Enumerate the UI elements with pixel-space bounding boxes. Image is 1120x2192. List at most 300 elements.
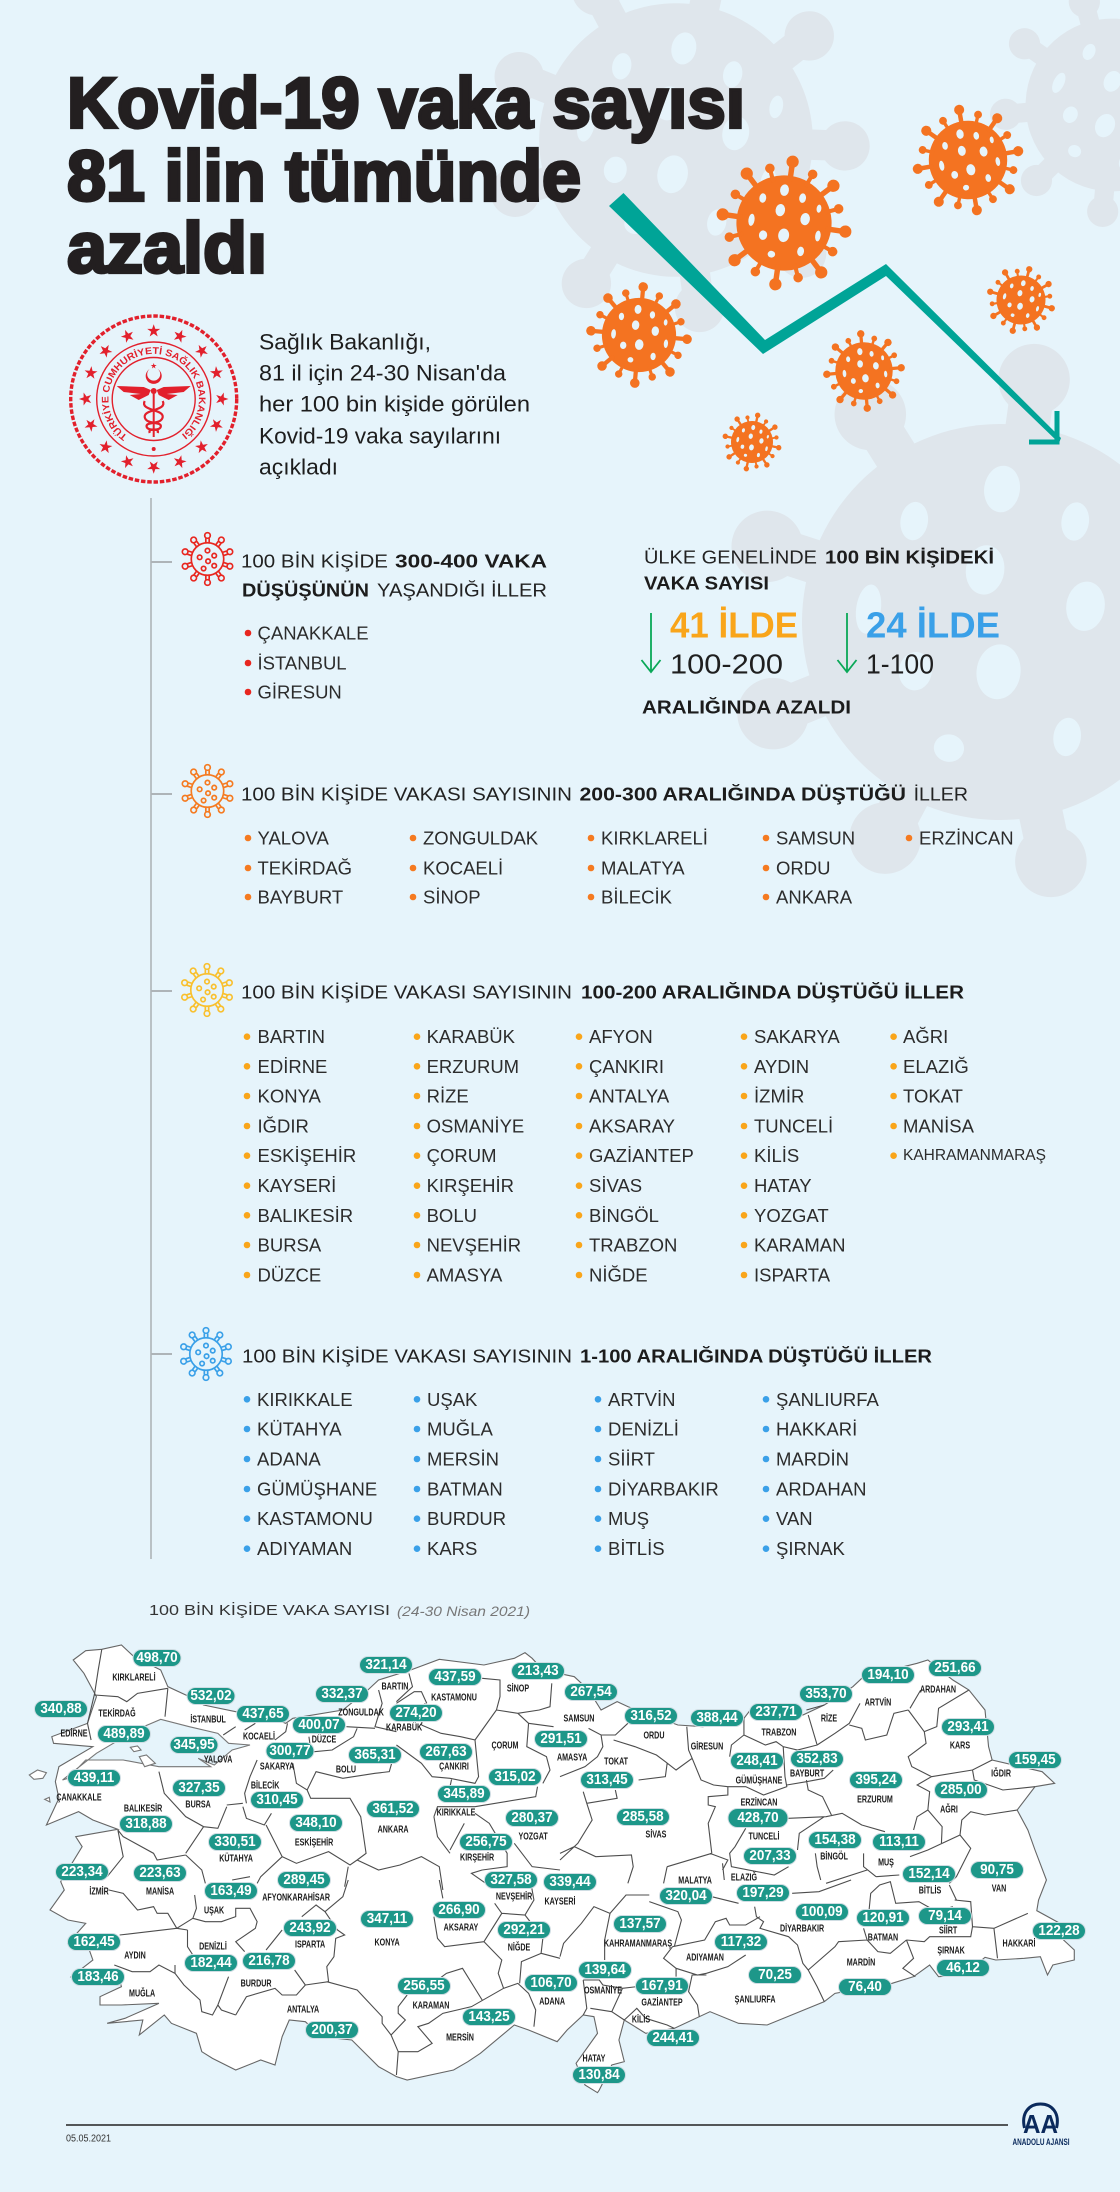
map: case value pills: 365,31 [354, 1747, 396, 1763]
intro text: açıkladı [259, 454, 338, 480]
map: case value pills: 280,37 [511, 1810, 553, 1826]
section 1 list [245, 622, 369, 702]
map: province names: SİİRT [939, 1924, 958, 1936]
map: case value pills: 70,25 [758, 1967, 792, 1983]
map: province names: KONYA [375, 1936, 400, 1948]
map: case value pills: 313,45 [586, 1772, 628, 1788]
map: province names: TRABZON [762, 1726, 796, 1738]
map: province names: ESKİŞEHİR [295, 1836, 334, 1848]
section 3 list: NİĞDE [589, 1264, 648, 1286]
map: case value pills: 266,90 [438, 1902, 480, 1918]
map: case value pills: 437,59 [434, 1669, 476, 1685]
section 2 list: ORDU [776, 858, 830, 878]
map: case value pills: 274,20 [395, 1705, 437, 1721]
section 1 heading [241, 550, 547, 600]
Anadolu Ajansı logo [1012, 2104, 1070, 2147]
section 3 list: KARAMAN [754, 1234, 846, 1256]
map: case value pills: 289,45 [283, 1872, 325, 1888]
date: 05.05.2021 [66, 2134, 111, 2144]
stat: 24 ilde: 1-100 [866, 648, 934, 680]
intro text: 81 il için 24-30 Nisan'da [259, 360, 507, 386]
map: province names: MUŞ [878, 1856, 894, 1868]
map: province names: BİLECİK [251, 1779, 280, 1791]
map: province names: YALOVA [204, 1753, 233, 1765]
section 2 list: MALATYA [601, 858, 685, 878]
map: province names: NİĞDE [508, 1940, 530, 1953]
map: province names: KİLİS [632, 2013, 650, 2025]
map: province names: MARDİN [847, 1956, 875, 1968]
title [67, 64, 745, 288]
map: province names: GAZİANTEP [641, 1996, 683, 2008]
icon: yellow virus outline [181, 964, 233, 1016]
map: case value pills: 320,04 [665, 1888, 707, 1904]
map: province names: AMASYA [557, 1751, 588, 1763]
map: case value pills: 137,57 [619, 1916, 661, 1932]
map: province names: KARABÜK [386, 1721, 423, 1733]
map: case value pills: 318,88 [125, 1816, 167, 1832]
map: case value pills: 532,02 [190, 1688, 232, 1704]
section 3 list: TOKAT [903, 1086, 963, 1106]
section 4 list: ARTVİN [608, 1389, 676, 1410]
map: case value pills: 113,11 [879, 1834, 919, 1850]
map: case value pills: 106,70 [530, 1975, 572, 1991]
section 1 list: GİRESUN [258, 682, 342, 702]
map: province names: MANİSA [146, 1885, 175, 1897]
map: case value pills: 267,54 [570, 1684, 612, 1700]
section 3 list: ESKİŞEHİR [258, 1145, 356, 1166]
map: case value pills: 332,37 [321, 1686, 363, 1702]
map: case value pills: 251,66 [934, 1660, 976, 1676]
section 3 list: TUNCELİ [754, 1116, 833, 1136]
section 3 list: ELAZIĞ [903, 1056, 969, 1077]
intro text: her 100 bin kişide görülen [259, 392, 530, 416]
section 3 list: KAHRAMANMARAŞ [903, 1147, 1046, 1164]
section 1 heading: 100 BİN KİŞİDE [241, 550, 388, 572]
map: province names: SİNOP [507, 1682, 529, 1694]
map: case value pills: 223,63 [139, 1865, 181, 1881]
map: province names: OSMANİYE [584, 1984, 622, 1996]
map: case value pills: 316,52 [630, 1708, 672, 1724]
section 2 list: ZONGULDAK [423, 828, 539, 848]
Anadolu Ajansı logo: AA [1023, 2109, 1058, 2139]
map: province names: KARS [950, 1739, 970, 1751]
map: case value pills: 352,83 [796, 1751, 838, 1767]
map: province names: TEKİRDAĞ [98, 1706, 136, 1719]
map: province names: BALIKESİR [124, 1802, 163, 1814]
map: province names: NEVŞEHİR [496, 1890, 533, 1902]
section 4 list: BATMAN [427, 1478, 503, 1500]
map: province names: ARTVİN [865, 1696, 891, 1708]
map: case value pills: 79,14 [928, 1908, 962, 1924]
summary footer: ARALIĞINDA AZALDI [642, 696, 851, 718]
map heading: 100 BİN KİŞİDE VAKA SAYISI [149, 1601, 390, 1619]
section 3 list: AĞRI [903, 1026, 948, 1047]
section 3 list: BOLU [427, 1205, 477, 1226]
section 4 heading: 100 BİN KİŞİDE VAKASI SAYISININ [242, 1346, 572, 1366]
map: province names: ANKARA [378, 1823, 409, 1835]
section 4 list: MUŞ [608, 1508, 649, 1529]
map: province names: MALATYA [678, 1874, 712, 1886]
map: province names: SİVAS [646, 1828, 666, 1840]
map: case value pills: 162,45 [73, 1934, 115, 1950]
section 1 heading: 300-400 VAKA [395, 550, 547, 572]
map: province names: BURSA [185, 1798, 211, 1810]
section 3: 100-200 [181, 964, 1046, 1286]
section 4 list: ŞANLIURFA [776, 1389, 879, 1410]
map: province names: IĞDIR [991, 1766, 1011, 1779]
section 2 list: BİLECİK [601, 886, 673, 908]
section 3 list: ISPARTA [754, 1264, 831, 1286]
map: province names: ŞIRNAK [937, 1944, 965, 1956]
map heading [149, 1601, 530, 1619]
trend arrow [609, 193, 1061, 443]
map: province names: BURDUR [241, 1977, 272, 1989]
section 1 list: İSTANBUL [258, 652, 347, 674]
map: case value pills: 207,33 [749, 1848, 791, 1864]
map: province names: MERSİN [446, 2031, 474, 2043]
map: case value pills: 439,11 [74, 1770, 114, 1786]
orange virus: large [707, 146, 861, 300]
map: case value pills: 159,45 [1014, 1752, 1056, 1768]
map: case value pills: 321,14 [365, 1657, 407, 1673]
map: case value pills: 256,55 [403, 1978, 445, 1994]
map: province names: ÇANAKKALE [56, 1791, 102, 1803]
map: case value pills: 498,70 [136, 1650, 178, 1666]
national summary panel [642, 546, 1000, 718]
map: province names: GİRESUN [691, 1740, 723, 1752]
map: province names: AKSARAY [444, 1921, 478, 1933]
map: province names: KIRIKKALE [437, 1806, 475, 1818]
map: province names: DİYARBAKIR [780, 1922, 825, 1934]
map heading: (24-30 Nisan 2021) [397, 1603, 530, 1619]
map: province names: AYDIN [124, 1949, 146, 1961]
section 3 heading: 100 BİN KİŞİDE VAKASI SAYISININ [241, 982, 572, 1002]
section 4 list: SİİRT [608, 1448, 655, 1470]
section 4 list: UŞAK [427, 1389, 478, 1410]
map: case value pills: 154,38 [814, 1832, 856, 1848]
arrow: down green 2 [838, 613, 856, 672]
section 4 list: MUĞLA [427, 1418, 493, 1440]
section 3 list: AMASYA [427, 1264, 503, 1286]
section 4 list: HAKKARİ [776, 1418, 857, 1440]
map: case value pills: 152,14 [908, 1866, 950, 1882]
section 4 list: ARDAHAN [776, 1478, 866, 1500]
section 2 list: ERZİNCAN [919, 828, 1014, 848]
section 3 heading: 100-200 ARALIĞINDA DÜŞTÜĞÜ İLLER [581, 982, 964, 1002]
section 3 list: HATAY [754, 1175, 812, 1196]
section 4: 1-100 [180, 1328, 932, 1559]
orange virus: right small [978, 257, 1064, 343]
orange virus: left [582, 278, 696, 392]
section 3 list: DÜZCE [258, 1264, 321, 1286]
section 3 list: ANTALYA [589, 1086, 670, 1106]
map: province names: EDİRNE [61, 1727, 87, 1739]
orange virus: top right [903, 95, 1033, 225]
map: province names: GÜMÜŞHANE [736, 1774, 782, 1786]
map: province names: ÇORUM [492, 1739, 518, 1751]
map: case value pills: 293,41 [947, 1719, 989, 1735]
section 3 list: BİNGÖL [589, 1205, 659, 1226]
map: case value pills: 100,09 [801, 1904, 843, 1920]
section 2 list: TEKİRDAĞ [258, 858, 352, 878]
section 3 list [244, 1026, 1046, 1286]
map: case value pills: 213,43 [517, 1663, 559, 1679]
section 4 list: BURDUR [427, 1508, 506, 1529]
map: province names: ERZİNCAN [741, 1796, 777, 1808]
section 4 list: KIRIKKALE [257, 1389, 353, 1410]
intro text: Sağlık Bakanlığı, [259, 330, 431, 354]
background virus: top centre [445, 0, 907, 367]
map: province names: SAKARYA [260, 1760, 295, 1772]
section 4 heading: 1-100 ARALIĞINDA DÜŞTÜĞÜ İLLER [580, 1346, 932, 1366]
section 2 list: SAMSUN [776, 828, 855, 848]
map: case value pills: 353,70 [805, 1686, 847, 1702]
section 4 list [244, 1389, 879, 1559]
map: province names: DÜZCE [312, 1733, 336, 1745]
map: case value pills: 300,77 [269, 1743, 311, 1759]
map: case value pills [34, 1650, 1086, 2084]
map: province names: BAYBURT [790, 1767, 825, 1779]
section 3 list: MANİSA [903, 1116, 975, 1136]
section 2 list: SİNOP [423, 886, 481, 908]
map: province names: BİNGÖL [820, 1850, 848, 1862]
map: province names: AFYONKARAHİSAR [262, 1891, 330, 1903]
map: case value pills: 428,70 [737, 1810, 779, 1826]
map: case value pills: 489,89 [103, 1726, 145, 1742]
section 4 list: ŞIRNAK [776, 1538, 846, 1559]
section 3 list: KAYSERİ [258, 1175, 336, 1196]
map: case value pills: 345,95 [173, 1737, 215, 1753]
section 1 heading: YAŞANDIĞI İLLER [377, 580, 547, 600]
map: case value pills: 182,44 [190, 1955, 232, 1971]
map: case value pills: 183,46 [77, 1969, 119, 1985]
section 3 list: NEVŞEHİR [427, 1234, 521, 1256]
section 3 list: TRABZON [589, 1234, 677, 1256]
section 3 list: İZMİR [754, 1086, 804, 1106]
map: case value pills: 244,41 [652, 2030, 694, 2046]
map: case value pills: 120,91 [862, 1910, 904, 1926]
map: case value pills: 139,64 [584, 1962, 626, 1978]
section 1: 300-400 [182, 533, 547, 702]
map: case value pills: 327,35 [178, 1780, 220, 1796]
background virus: right middle [682, 305, 1120, 934]
section 3 list: KIRŞEHİR [427, 1175, 514, 1196]
summary heading: 100 BİN KİŞİDEKİ [825, 546, 994, 568]
map: province names: BİTLİS [919, 1884, 941, 1896]
section 3 list: BURSA [258, 1234, 322, 1256]
map: province names: KOCAELİ [243, 1730, 275, 1742]
section 3 list: ÇORUM [427, 1145, 496, 1166]
map: case value pills: 395,24 [855, 1772, 897, 1788]
map: case value pills: 200,37 [311, 2022, 353, 2038]
map: province names: ORDU [643, 1729, 665, 1741]
section 3 list: YOZGAT [754, 1205, 829, 1226]
section 3 list: KONYA [258, 1086, 322, 1106]
section 4 heading [242, 1346, 932, 1366]
summary heading [644, 546, 994, 594]
map: case value pills: 90,75 [980, 1862, 1014, 1878]
map: province names [56, 1671, 1035, 2064]
Anadolu Ajansı logo: ANADOLU AJANSI [1012, 2137, 1070, 2147]
map: case value pills: 292,21 [503, 1922, 545, 1938]
section 3 list: BALIKESİR [258, 1205, 353, 1226]
map: province names: MUĞLA [129, 1986, 156, 1999]
intro text [259, 330, 530, 480]
map: province names: YOZGAT [519, 1830, 548, 1842]
background virus: top right [949, 0, 1120, 266]
map: province names: HATAY [583, 2052, 605, 2064]
map: province names: ELAZIĞ [731, 1870, 757, 1883]
map: case value pills: 285,00 [940, 1782, 982, 1798]
map: province names: ADIYAMAN [686, 1951, 724, 1963]
icon: red virus [182, 533, 233, 585]
section 4 list: ADIYAMAN [257, 1538, 352, 1559]
section 3 heading [241, 982, 964, 1002]
section 3 list: GAZİANTEP [589, 1145, 694, 1166]
title: azaldı [67, 210, 267, 288]
stat: 24 ilde [866, 604, 1000, 680]
map: case value pills: 361,52 [372, 1801, 414, 1817]
map: case value pills: 285,58 [622, 1809, 664, 1825]
map: province names: AĞRI [940, 1802, 958, 1815]
section 3 list: OSMANİYE [427, 1116, 524, 1136]
map: case value pills: 237,71 [755, 1704, 797, 1720]
map: case value pills: 117,32 [721, 1934, 761, 1950]
section 2 list: YALOVA [258, 828, 329, 848]
map: province names: BATMAN [868, 1931, 898, 1943]
icon: orange virus outline [182, 765, 233, 817]
map: province names: UŞAK [204, 1904, 225, 1916]
map: case value pills: 340,88 [40, 1701, 82, 1717]
map: case value pills: 339,44 [549, 1874, 591, 1890]
map: province names: ARDAHAN [920, 1683, 956, 1695]
map: province names: İZMİR [89, 1885, 109, 1897]
orange virus: centre [820, 327, 908, 415]
map: case value pills: 143,25 [468, 2009, 510, 2025]
map: province names: ERZURUM [857, 1793, 893, 1805]
section 2 heading: 100 BİN KİŞİDE VAKASI SAYISININ [241, 784, 572, 804]
map: case value pills: 256,75 [465, 1834, 507, 1850]
summary heading: VAKA SAYISI [644, 572, 769, 594]
map: province names: KIRKLARELİ [112, 1671, 156, 1683]
stat: 41 ilde: 100-200 [670, 648, 783, 680]
map: province names: TUNCELİ [749, 1830, 779, 1842]
section 3 list: IĞDIR [258, 1116, 309, 1136]
map: case value pills: 310,45 [256, 1792, 298, 1808]
map: province names: KÜTAHYA [219, 1852, 253, 1864]
map: province names: VAN [992, 1882, 1006, 1894]
section 4 list: DENİZLİ [608, 1418, 679, 1440]
section 4 list: ADANA [257, 1448, 321, 1470]
map: case value pills: 167,91 [641, 1978, 683, 1994]
section 4 list: VAN [776, 1508, 813, 1529]
section 2 heading: 200-300 ARALIĞINDA DÜŞTÜĞÜ [580, 784, 906, 804]
icon: blue virus outline [180, 1328, 232, 1380]
map: case value pills: 248,41 [736, 1753, 778, 1769]
section 4 list: MARDİN [776, 1448, 849, 1470]
map: province names: ÇANKIRI [439, 1760, 469, 1772]
map: case value pills: 348,10 [295, 1815, 337, 1831]
map: case value pills: 243,92 [289, 1920, 331, 1936]
map: case value pills: 76,40 [848, 1979, 882, 1995]
section 2 heading: İLLER [914, 784, 968, 804]
map: case value pills: 194,10 [867, 1667, 909, 1683]
section 2 heading [241, 784, 968, 804]
map: province names: KASTAMONU [431, 1691, 477, 1703]
map: province names: SAMSUN [564, 1712, 594, 1724]
section 3 list: AYDIN [754, 1056, 809, 1077]
section 2 list [245, 828, 1014, 908]
map: province names: HAKKARİ [1003, 1937, 1035, 1949]
map: province names: KAHRAMANMARAŞ [604, 1937, 672, 1949]
section 4 list: KARS [427, 1538, 477, 1559]
map: case value pills: 347,11 [367, 1911, 407, 1927]
timeline [151, 498, 172, 1559]
map: province names: ZONGULDAK [338, 1706, 384, 1718]
section 3 list: AKSARAY [589, 1116, 675, 1136]
section 3 list: AFYON [589, 1026, 653, 1047]
intro text: Kovid-19 vaka sayılarını [259, 424, 501, 448]
map: case value pills: 216,78 [248, 1953, 290, 1969]
map: province names: İSTANBUL [190, 1713, 226, 1725]
section 3 list: KARABÜK [427, 1026, 516, 1047]
section 4 list: GÜMÜŞHANE [257, 1478, 377, 1500]
map: province names: DENİZLİ [199, 1940, 227, 1952]
title: Kovid-19 vaka sayısı [67, 64, 745, 144]
map: province names: ISPARTA [295, 1938, 326, 1950]
map: province names: KARAMAN [413, 1999, 449, 2011]
stat: 24 ilde: 24 İLDE [866, 604, 1000, 646]
map: case value pills: 130,84 [578, 2067, 620, 2083]
map: case value pills: 46,12 [946, 1960, 980, 1976]
section 3 list: RİZE [427, 1086, 469, 1106]
map: province names: KAYSERİ [544, 1895, 576, 1907]
section 4 list: KÜTAHYA [257, 1418, 342, 1440]
map: province names: RİZE [821, 1712, 837, 1724]
map: provinces and borders [29, 1645, 1074, 2093]
section 1 list: ÇANAKKALE [258, 622, 369, 644]
section 2 list: KIRKLARELİ [601, 828, 708, 848]
map: case value pills: 345,89 [443, 1786, 485, 1802]
map: case value pills: 163,49 [210, 1883, 252, 1899]
ministry logo: TÜRKİYE CUMHURİYETİ SAĞLIK BAKANLIĞI [102, 346, 206, 442]
map: case value pills: 122,28 [1038, 1923, 1080, 1939]
footer rule [66, 2124, 1008, 2126]
section 2: 200-300 [182, 765, 1014, 908]
map: province names: ANTALYA [287, 2003, 320, 2015]
stat: 41 ilde: 41 İLDE [670, 604, 798, 646]
stat: 41 ilde [670, 604, 798, 680]
map: province names: BOLU [336, 1763, 356, 1775]
map: case value pills: 197,29 [742, 1885, 784, 1901]
section 4 list: BİTLİS [608, 1538, 665, 1559]
arrow: down green 1 [642, 613, 660, 672]
section 2 list: ANKARA [776, 886, 853, 908]
map: case value pills: 327,58 [490, 1872, 532, 1888]
map: case value pills: 437,65 [242, 1706, 284, 1722]
map: province names: KIRŞEHİR [460, 1851, 495, 1863]
summary heading: ÜLKE GENELİNDE [644, 546, 817, 568]
map: province names: BARTIN [382, 1680, 408, 1692]
ministry logo [69, 314, 238, 484]
map: case value pills: 330,51 [214, 1834, 256, 1850]
section 3 list: ERZURUM [427, 1056, 519, 1077]
map: province names: TOKAT [604, 1755, 628, 1767]
section 3 list: KİLİS [754, 1145, 799, 1166]
title: 81 ilin tümünde [67, 138, 581, 216]
section 3 list: SAKARYA [754, 1026, 840, 1047]
section 3 list: ÇANKIRI [589, 1056, 664, 1077]
